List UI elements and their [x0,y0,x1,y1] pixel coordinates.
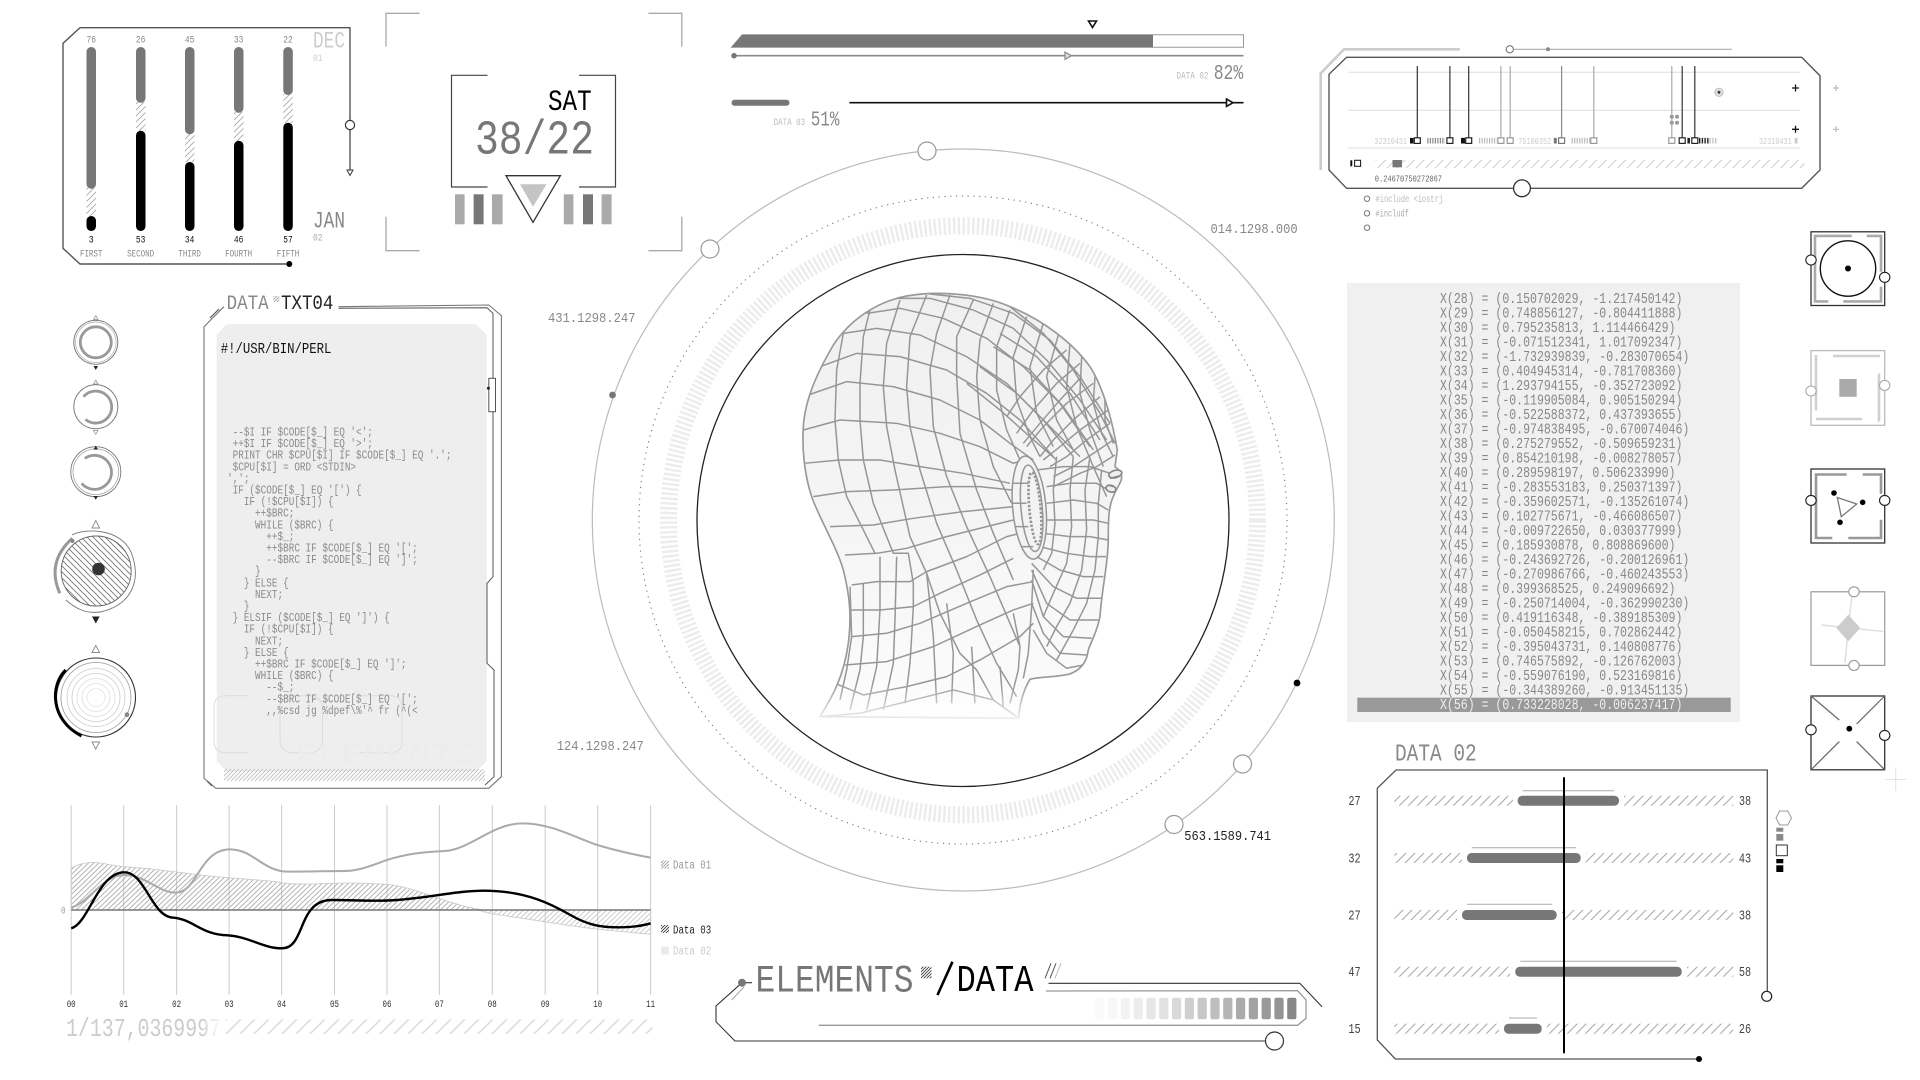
ear [1008,455,1050,561]
panel: signal strip [1321,46,1839,230]
right values: 58 [1739,966,1751,981]
axis labels: 09 [541,1000,550,1011]
numeric readout: 0.24670750272067 [1375,174,1442,185]
head silhouette [803,293,1122,718]
axis labels: 03 [225,1000,234,1011]
table rows: X(46) = (-0.243692726, -0.200126961) [1440,553,1689,570]
code lines: ,,%csd jg %dpef\%'^ fr (^(< [233,705,418,718]
table background [1347,283,1740,722]
code lines: --$BRC IF $CODE[$_] EQ ']'; [233,554,418,568]
bottom values: 3 [89,234,94,246]
axis labels: 11 [646,1000,655,1011]
table rows: X(41) = (-0.283553183, 0.250371397) [1440,480,1682,497]
frame nodes [286,120,355,267]
table rows: X(45) = (0.185930878, 0.808869600) [1440,538,1675,555]
barcode numbers: 32310431 [1759,137,1792,147]
panel: bottom title banner [716,960,1322,1050]
axis labels: 04 [277,1000,286,1011]
top values: 22 [283,34,293,46]
barcode numbers [1374,137,1792,147]
zero label: 0 [61,906,66,918]
panel: monthly bars [63,28,355,267]
panel: code listing [204,293,501,788]
icon: triangle [506,176,560,222]
wireframe head [803,293,1123,727]
mesh lines [803,294,1115,717]
coordinate labels: 563.1589.741 [1184,829,1271,845]
constant readout: 1/137,0369997 [66,1014,221,1044]
zero line [71,909,651,911]
barcode numbers: 32310431 [1374,137,1407,147]
date value: 38/22 [475,114,594,168]
month labels: DEC [313,29,345,55]
eye [1105,469,1123,493]
panel frame [63,28,350,264]
label: data 03 [774,110,840,133]
top values: 26 [136,34,145,46]
code lines: ++$_; [233,531,294,544]
table rows: X(34) = (1.293794155, -0.352723092) [1440,379,1682,396]
code lines: ++$I IF $CODE[$_] EQ '>'; [233,438,373,452]
table rows: X(54) = (-0.559076190, 0.523169816) [1440,669,1682,686]
top slider [1506,46,1732,53]
axis labels: 08 [488,1000,497,1011]
code lines: NEXT; [233,589,283,602]
left values: 47 [1348,966,1361,981]
line: data 01 [71,823,651,907]
right values: 26 [1739,1023,1751,1038]
right values: 38 [1739,909,1751,924]
icon: triangle box [1806,469,1890,543]
icon: cross box [1806,696,1890,770]
bottom values: 46 [234,234,243,246]
table rows: X(28) = (0.150702029, -1.217450142) [1440,292,1682,309]
outer corner brackets [386,13,682,251]
coordinate labels: 431.1298.247 [548,311,636,327]
axis labels: 06 [382,1000,392,1011]
code lines: } ELSIF ($CODE[$_] EQ ']') { [233,612,390,626]
table rows: X(56) = (0.733228028, -0.006237417) [1440,698,1682,715]
line chart [61,805,711,1044]
code lines: $CPU[$I] = ORD <STDIN> [233,461,356,475]
gauge 5 [55,646,136,749]
icon: plus [1885,768,1906,791]
table rows: X(52) = (-0.395043731, 0.140808776) [1440,640,1682,657]
panel: data 02 range chart [1348,742,1792,1062]
month labels: JAN [313,208,345,234]
inner ring [697,254,1229,786]
code bullets [1364,194,1443,230]
title: DATA 02 [1395,742,1477,769]
table rows: X(30) = (0.795235813, 1.114466429) [1440,321,1675,338]
gauge 2 [74,380,118,434]
end node [1266,1032,1284,1050]
icon: square box [1806,351,1890,425]
table rows: X(51) = (-0.050458215, 0.702862442) [1440,625,1682,642]
code lines: } ELSE { [233,577,289,591]
level bars [455,194,612,224]
panel: date readout [386,13,682,251]
frame [204,305,501,788]
code lines: --$_; [233,682,294,695]
legend: Data 03 [673,924,711,937]
frame outer [716,983,1265,1041]
table rows: X(44) = (-0.009722650, 0.030377999) [1440,524,1682,541]
coordinate labels [548,222,1298,845]
axis labels: 02 [172,1000,181,1011]
scroll handle [487,378,496,412]
left values [1348,795,1361,1038]
right values: 38 [1739,795,1751,810]
hatched scale [1350,160,1804,168]
panel: progress bars [731,21,1244,133]
signal markers [1414,66,1698,143]
table rows: X(36) = (-0.522588372, 0.437393655) [1440,408,1682,425]
legend [661,860,711,959]
hatch tracks [1394,796,1733,1034]
code lines: } ELSE { [233,647,289,660]
small markers [1670,84,1839,133]
month labels: 02 [313,234,322,244]
table rows: X(32) = (-1.732939839, -0.283070654) [1440,350,1689,367]
gauge 1 [74,316,118,370]
table rows: X(53) = (0.746575892, -0.126762003) [1440,654,1682,671]
hatch strip [224,769,485,781]
top values: 33 [234,34,243,46]
axis labels: 05 [330,1000,339,1011]
code heading: #!/USR/BIN/PERL [221,341,331,358]
grid lines [1348,72,1800,148]
code lines: } [233,566,261,579]
axis labels: 07 [435,1000,444,1011]
table rows: X(49) = (-0.250714004, -0.362990230) [1440,596,1689,613]
dotted ring [639,196,1287,844]
left values: 15 [1348,1023,1361,1038]
legend: Data 01 [673,860,711,873]
code lines: ','; [227,473,250,486]
bar chart [86,47,293,231]
bar labels: FIRST [80,250,102,261]
panel background [217,324,487,772]
highlighted row [1357,698,1731,712]
top values: 76 [86,34,96,46]
code bullets: #include <iostrj [1376,194,1443,206]
icon: status stack [1776,811,1792,872]
table rows: X(39) = (0.854210198, -0.008278057) [1440,451,1682,468]
title: elements: ELEMENTS [756,960,914,1004]
barcode numbers: 75100352 [1518,137,1551,147]
tick ring [668,226,1258,815]
axis labels: 01 [119,1000,128,1011]
coordinate labels: 124.1298.247 [557,739,644,755]
month labels: 01 [313,54,322,65]
title: data: DATA [956,960,1034,1003]
top values [86,34,293,46]
table rows [1440,292,1689,715]
left values: 27 [1348,909,1361,924]
label: data 02: 82% [1214,63,1244,86]
panel title [227,293,333,316]
hatch glyph [921,967,932,978]
marker line [1563,777,1565,1053]
axis labels: 10 [593,1000,602,1011]
legend: Data 02 [673,946,711,959]
gauge 3 [71,446,121,500]
label: data 02 [1176,63,1244,86]
slash light [1055,963,1061,978]
bar labels: SECOND [127,250,154,261]
code lines: --$BRC IF $CODE[$_] EQ '['; [233,693,418,707]
panel: icon boxes [1806,232,1906,791]
inner bracket [452,75,616,187]
code lines: ++$BRC IF $CODE[$_] EQ ']'; [233,659,407,672]
coordinate labels: 014.1298.000 [1210,222,1298,238]
month labels [313,29,345,245]
frame [1377,770,1767,1059]
code lines: NEXT; [233,635,283,649]
table rows: X(33) = (0.404945314, -0.781708360) [1440,364,1682,381]
label: data 03: 51% [811,110,840,133]
frame accents [732,979,1322,1025]
inner rails [338,308,494,785]
icon: diamond box [1811,587,1885,670]
left values: 27 [1348,795,1361,810]
code lines: } [233,601,249,614]
code lines: IF (!$CPU[$I]) { [233,624,334,637]
bar labels [80,250,299,261]
barcode ticks [1410,138,1798,143]
chart grid [71,805,651,995]
ghost watermark [214,696,476,772]
table rows: X(47) = (-0.270986766, -0.460243553) [1440,567,1689,584]
code lines: ++$BRC; [233,508,294,521]
line: data 03 [71,872,651,948]
progress track [731,52,1244,59]
code lines [227,427,451,718]
bottom node [1514,180,1530,197]
outer accent line [1321,49,1460,170]
table rows: X(48) = (0.399368525, 0.249096692) [1440,582,1675,599]
axis labels [67,1000,655,1011]
label: data 02: DATA 02 [1176,71,1208,82]
code lines: WHILE ($BRC) { [233,519,334,533]
code bullets: #includf [1376,209,1409,221]
table rows: X(31) = (-0.071512341, 1.017092347) [1440,335,1682,352]
table rows: X(40) = (0.289598197, 0.506233990) [1440,466,1675,483]
plotted series [71,823,651,948]
bottom values: 57 [283,234,293,246]
bar labels: THIRD [178,250,201,261]
table rows: X(43) = (0.102775671, -0.466086507) [1440,509,1682,526]
bottom values: 53 [136,234,145,246]
right values: 43 [1739,852,1751,867]
table rows: X(55) = (-0.344389260, -0.913451135) [1440,683,1689,700]
left values: 32 [1348,852,1361,867]
progress bar 82 percent [732,21,1244,47]
icon: target box [1806,232,1890,306]
gauge 4 [55,520,135,624]
frame [1329,57,1820,188]
outer ring [592,149,1334,891]
table rows: X(50) = (0.419116348, -0.389185309) [1440,611,1682,628]
code lines: WHILE ($BRC) { [233,670,334,684]
top values: 45 [185,34,194,46]
code lines: ++$BRC IF $CODE[$_] EQ '['; [233,543,418,556]
label: data 03: DATA 03 [774,118,805,129]
bottom values [89,234,293,246]
table rows: X(37) = (-0.974838495, -0.670074046) [1440,422,1689,439]
frame nodes [1696,991,1772,1062]
code lines: IF (!$CPU[$I]) { [233,496,334,510]
range pills [1457,791,1687,1035]
constant readout [66,1014,653,1044]
bar labels: FIFTH [277,250,299,261]
radar rings [592,142,1334,891]
neck fade [810,683,1037,727]
table rows: X(42) = (-0.359602571, -0.135261074) [1440,495,1689,512]
bar labels: FOURTH [225,250,252,261]
ring nodes [609,142,1300,834]
code lines: PRINT CHR $CPU[$I] IF $CODE[$_] EQ '.'; [233,450,451,463]
panel: table of coordinates [1347,283,1740,722]
table rows: X(38) = (0.275279552, -0.509659231) [1440,437,1682,454]
area: data 02 [71,862,651,934]
code lines: IF ($CODE[$_] EQ '[') { [233,485,362,498]
corner tick [207,309,219,786]
panel title: TXT04 [281,293,333,316]
slashes [1045,963,1056,978]
table rows: X(35) = (-0.119905084, 0.905150294) [1440,393,1682,410]
table rows: X(29) = (0.748856127, -0.804411888) [1440,306,1682,323]
bottom values: 34 [185,234,194,246]
day label: SAT [548,86,592,120]
axis labels: 00 [67,1000,76,1011]
level segments [1095,998,1296,1019]
ghost watermark: ELEMENTS [296,741,476,772]
code lines: --$I IF $CODE[$_] EQ '<'; [233,427,373,440]
progress bar 51 percent [732,99,1244,106]
panel: control gauges [55,316,136,749]
right values [1739,795,1751,1038]
panel title: DATA [227,293,269,316]
